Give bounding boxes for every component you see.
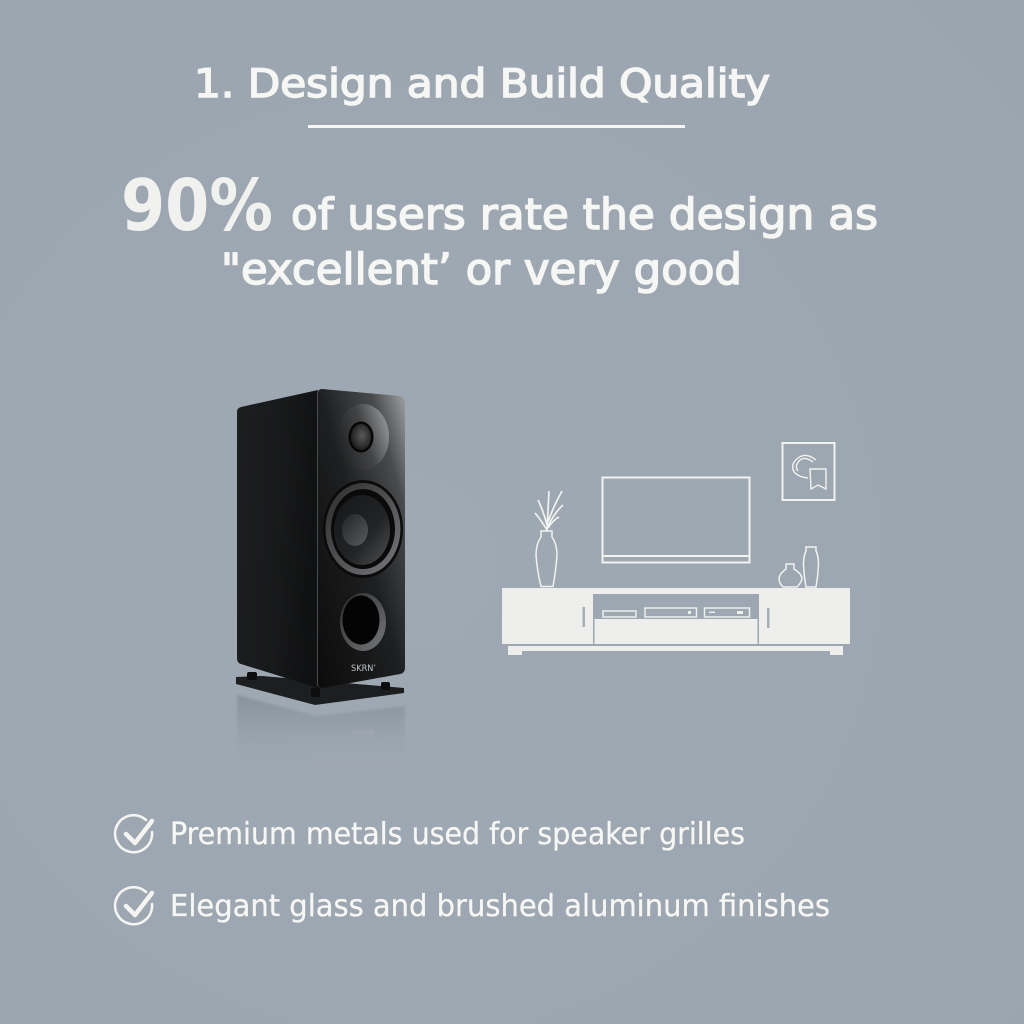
console plinth <box>508 646 843 655</box>
stat description line 2: "excellent’ or very good <box>221 245 742 295</box>
vase with branches <box>535 491 563 586</box>
console drawer <box>594 619 758 644</box>
media device right <box>704 608 750 617</box>
checklist text 1: Premium metals used for speaker grilles <box>170 817 745 852</box>
checklist item 1 <box>115 815 745 852</box>
media device left <box>603 611 636 617</box>
speaker foot centre <box>311 688 320 697</box>
mirrored logo: SKRN <box>351 728 375 737</box>
speaker base plate <box>236 676 404 705</box>
speaker foot left <box>247 672 257 680</box>
left door handle <box>582 607 585 627</box>
illustration: living room media wall <box>502 443 850 655</box>
stat value: 90%: 90% <box>121 164 273 247</box>
stat description line 1: of users rate the design as <box>291 190 878 240</box>
media console <box>502 588 850 655</box>
cabinet side <box>237 390 318 688</box>
tweeter <box>337 404 389 470</box>
headline statistic <box>121 164 878 295</box>
wall picture frame <box>782 443 834 500</box>
icon: check circle <box>115 887 152 924</box>
wall-mounted TV <box>602 478 750 562</box>
small round vase <box>779 564 802 587</box>
picture emblem <box>793 455 826 489</box>
icon: check circle <box>115 815 152 852</box>
cabinet edge highlight <box>316 391 318 686</box>
checklist item 2 <box>115 887 830 924</box>
icon: black floorstanding speaker <box>236 389 405 705</box>
brand logo: SKRN’ <box>351 664 376 674</box>
tall vase <box>804 547 818 587</box>
console body <box>502 588 850 644</box>
bass port <box>340 593 386 651</box>
media device centre <box>645 608 696 617</box>
right door handle <box>767 608 770 628</box>
title: 1. Design and Build Quality <box>194 62 770 107</box>
speaker foot right <box>381 682 390 690</box>
speaker reflection <box>237 695 405 772</box>
cabinet front <box>318 389 405 688</box>
woofer <box>323 480 403 578</box>
title underline <box>308 125 685 128</box>
checklist text 2: Elegant glass and brushed aluminum finishes <box>170 889 830 924</box>
